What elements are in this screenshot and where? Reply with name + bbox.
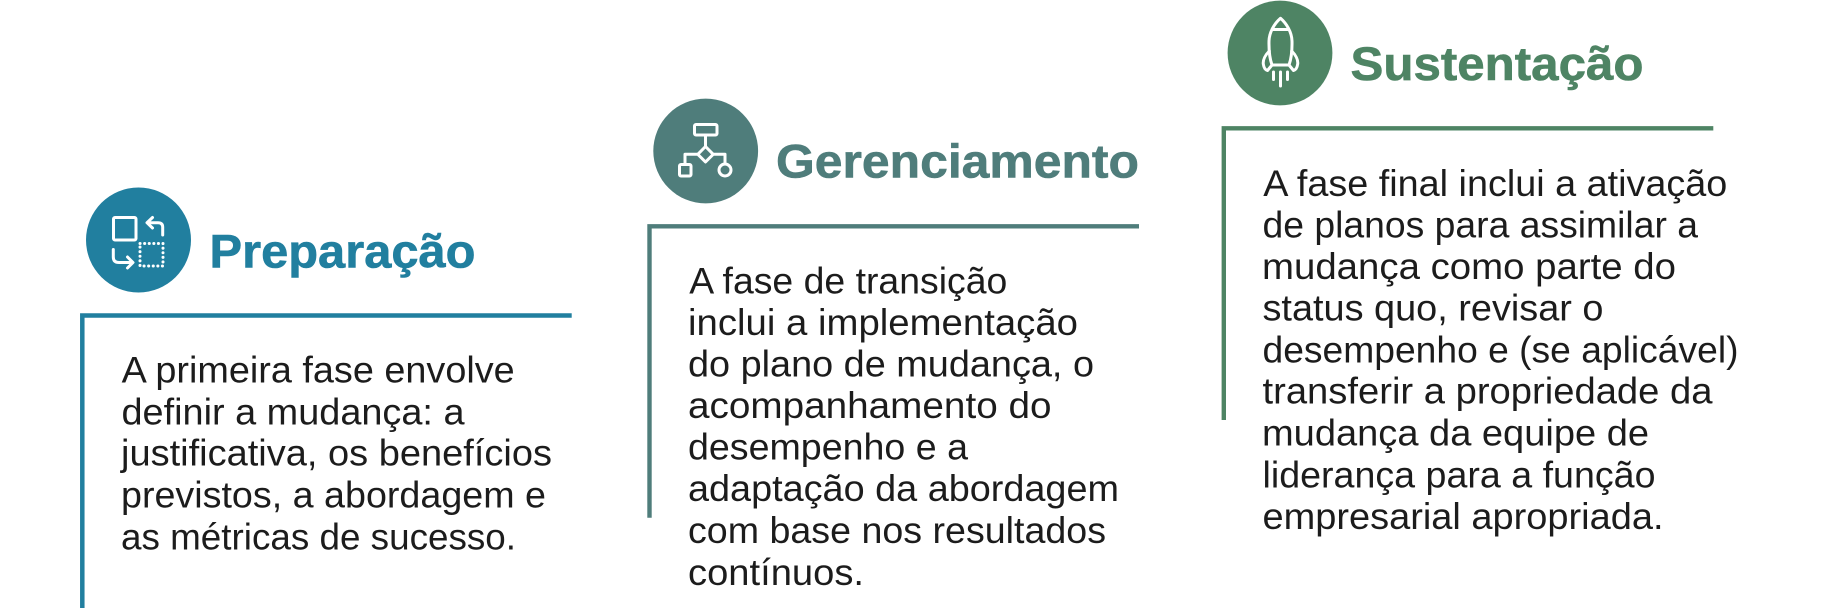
text block: mudança como parte do xyxy=(1262,246,1676,287)
frame lines xyxy=(82,316,572,608)
text block xyxy=(688,260,1119,593)
text block: liderança para a função xyxy=(1262,454,1656,496)
text block xyxy=(120,350,552,558)
text block: do plano de mudança, o xyxy=(688,344,1094,384)
icon: rocket xyxy=(1228,1,1332,105)
text block: com base nos resultados xyxy=(688,510,1106,551)
icon: flowchart xyxy=(653,99,758,203)
text block: desempenho e (se aplicável) xyxy=(1262,330,1738,370)
text block: A fase final inclui a ativação xyxy=(1263,163,1727,204)
text block: A primeira fase envolve xyxy=(122,350,515,390)
text block: definir a mudança: a xyxy=(122,392,465,432)
text block: transferir a propriedade da xyxy=(1262,370,1713,412)
text block: inclui a implementação xyxy=(688,302,1078,343)
text block: contínuos. xyxy=(688,552,864,593)
frame lines xyxy=(650,226,1139,518)
text block: as métricas de sucesso. xyxy=(121,516,516,558)
text block: A fase de transição xyxy=(689,260,1007,301)
text block: previstos, a abordagem e xyxy=(121,474,546,516)
text block: justificativa, os benefícios xyxy=(120,432,552,474)
text block: de planos para assimilar a xyxy=(1262,204,1698,246)
heading: Sustentação: Sustentação xyxy=(1350,37,1644,90)
text block xyxy=(1262,163,1738,537)
panel: Sustentação xyxy=(1224,1,1738,537)
text block: empresarial apropriada. xyxy=(1262,496,1664,537)
panel: Gerenciamento xyxy=(650,99,1139,593)
icon: swap squares xyxy=(86,188,191,292)
text block: mudança da equipe de xyxy=(1262,412,1649,454)
text block: adaptação da abordagem xyxy=(688,468,1119,509)
panel: Preparação xyxy=(82,188,572,608)
text block: acompanhamento do xyxy=(688,385,1052,426)
frame lines xyxy=(1224,128,1713,420)
heading: Preparação: Preparação xyxy=(210,224,476,277)
text block: status quo, revisar o xyxy=(1262,288,1604,328)
heading: Gerenciamento: Gerenciamento xyxy=(776,134,1139,187)
text block: desempenho e a xyxy=(688,426,968,468)
